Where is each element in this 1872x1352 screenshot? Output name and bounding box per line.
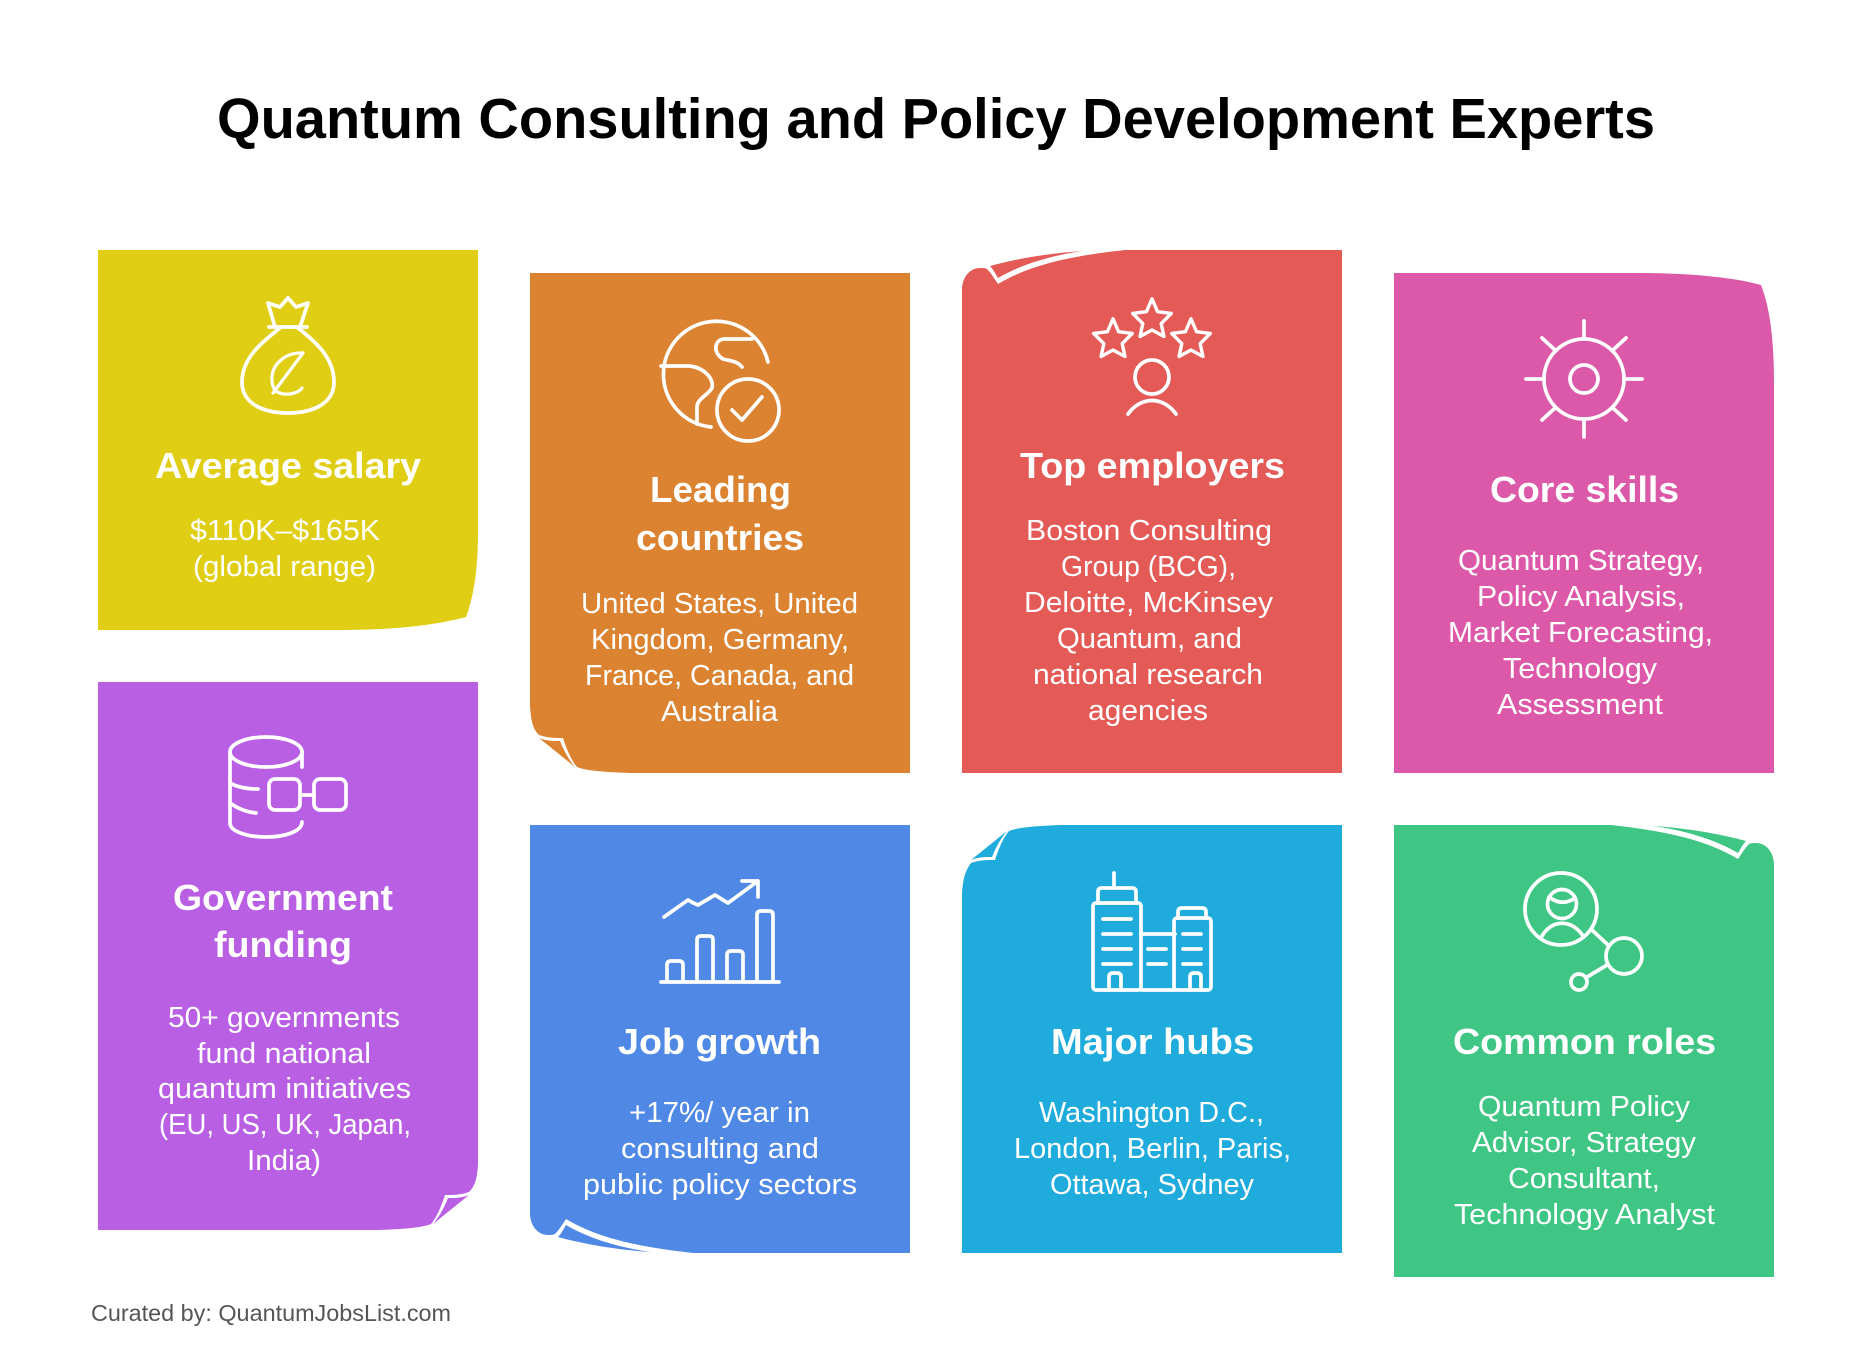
body text — [190, 515, 381, 583]
heading: countries — [636, 517, 804, 558]
body text: (EU, US, UK, Japan, — [159, 1109, 411, 1141]
heading: Top employers — [1020, 445, 1285, 486]
body text: Policy Analysis, — [1477, 581, 1685, 613]
icon: database link — [230, 737, 346, 837]
heading: Major hubs — [1051, 1021, 1254, 1062]
body text: quantum initiatives — [158, 1073, 411, 1105]
body text — [1024, 515, 1274, 727]
body text: United States, United — [581, 588, 858, 620]
page curl — [990, 251, 1083, 278]
panel: core skills — [1394, 273, 1774, 773]
page curl — [539, 738, 575, 767]
body text: fund national — [197, 1038, 371, 1070]
body text: Deloitte, McKinsey — [1024, 587, 1274, 619]
body text: +17%/ year in — [629, 1097, 810, 1129]
title: Quantum Consulting and Policy Development Experts — [217, 87, 1655, 151]
page curl — [558, 1225, 651, 1252]
body text: Washington D.C., — [1039, 1097, 1264, 1129]
body text: India) — [247, 1145, 321, 1177]
icon: globe with check — [661, 321, 779, 441]
card background: orange — [530, 273, 910, 773]
body text: Boston Consulting — [1026, 515, 1272, 547]
card background: red — [962, 250, 1342, 773]
body text — [581, 588, 858, 728]
heading: Common roles — [1453, 1021, 1716, 1062]
body text: (global range) — [193, 551, 376, 583]
body text: Market Forecasting, — [1448, 617, 1713, 649]
panel: common roles — [1394, 825, 1774, 1277]
heading: funding — [214, 924, 352, 965]
body text: $110K–$165K — [190, 515, 381, 547]
page curl — [433, 1195, 469, 1224]
card background: blue — [530, 825, 910, 1253]
heading — [636, 469, 804, 558]
body text: consulting and — [621, 1133, 819, 1165]
panel: major hubs — [962, 825, 1342, 1253]
body text: Technology Analyst — [1454, 1199, 1715, 1231]
body text: France, Canada, and — [585, 660, 854, 692]
body text: 50+ governments — [168, 1002, 400, 1034]
heading: Job growth — [618, 1021, 821, 1062]
body text: agencies — [1088, 695, 1208, 727]
body text: Australia — [661, 696, 779, 728]
body text: national research — [1033, 659, 1263, 691]
body text: Kingdom, Germany, — [591, 624, 849, 656]
card background: green — [1394, 825, 1774, 1277]
body text — [583, 1097, 857, 1201]
icon: stars above person — [1094, 299, 1210, 414]
body text: Assessment — [1497, 689, 1663, 721]
page curl — [1653, 826, 1746, 853]
body text: Group (BCG), — [1061, 551, 1236, 583]
body text: Quantum Policy — [1478, 1091, 1691, 1123]
body text: Technology — [1503, 653, 1658, 685]
heading: Government — [173, 877, 393, 918]
body text: Quantum, and — [1057, 623, 1242, 655]
body text — [1448, 545, 1713, 721]
heading: Core skills — [1490, 469, 1679, 510]
body text — [158, 1002, 411, 1177]
heading — [173, 877, 393, 965]
heading: Leading — [650, 469, 791, 510]
body text: public policy sectors — [583, 1169, 857, 1201]
icon: city buildings — [1093, 873, 1211, 990]
icon: growth chart — [661, 881, 779, 982]
body text: Advisor, Strategy — [1472, 1127, 1697, 1159]
body text — [1014, 1097, 1291, 1201]
panel: leading countries — [530, 273, 910, 773]
body text: London, Berlin, Paris, — [1014, 1133, 1291, 1165]
card background: cyan — [962, 825, 1342, 1253]
icon: gear sun — [1526, 321, 1642, 437]
card background: purple — [98, 682, 478, 1230]
body text: Consultant, — [1508, 1163, 1660, 1195]
card background: yellow — [98, 250, 478, 630]
card background: pink — [1394, 273, 1774, 773]
icon: person network — [1525, 873, 1642, 990]
footer credit: Curated by: QuantumJobsList.com — [91, 1300, 451, 1326]
body text: Ottawa, Sydney — [1050, 1169, 1254, 1201]
body text: Quantum Strategy, — [1458, 545, 1704, 577]
page curl — [971, 831, 1007, 860]
icon: money bag — [242, 298, 334, 413]
body text — [1454, 1091, 1715, 1231]
heading: Average salary — [155, 445, 421, 486]
panel: average salary — [98, 250, 478, 630]
panel: top employers — [962, 250, 1342, 773]
panel: job growth — [530, 825, 910, 1253]
panel: government funding — [98, 682, 478, 1230]
